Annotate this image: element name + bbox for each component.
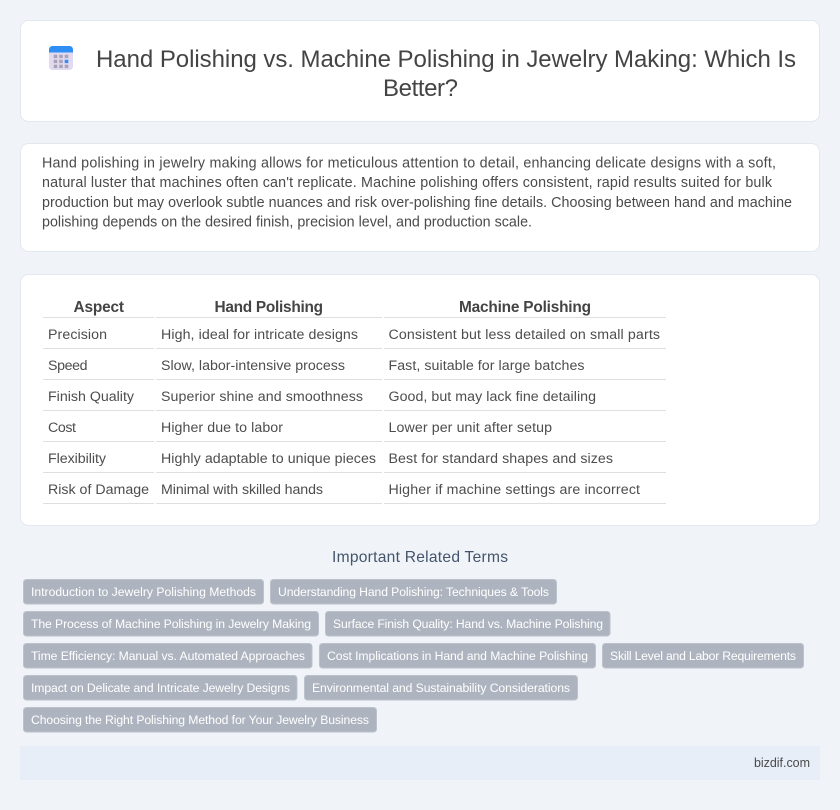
row: risk of damage: Minimal with skilled hands bbox=[161, 482, 323, 498]
tag: Introduction to Jewelry Polishing Methods bbox=[31, 585, 256, 599]
tag: Cost Implications in Hand and Machine Polishing bbox=[327, 649, 588, 663]
tag: The Process of Machine Polishing in Jewelry Making bbox=[31, 617, 311, 631]
row: finish quality: Superior shine and smoothness bbox=[161, 389, 363, 405]
heading: important related terms: Important Related Terms bbox=[332, 549, 508, 566]
row: finish quality: Finish Quality bbox=[48, 389, 135, 405]
tag: Choosing the Right Polishing Method for Your Jewelry Business bbox=[31, 713, 369, 727]
row: cost: Lower per unit after setup bbox=[388, 420, 552, 436]
row: finish quality bbox=[48, 389, 596, 405]
panel: comparison table bbox=[20, 274, 820, 526]
tag bbox=[320, 644, 596, 668]
row: cost bbox=[48, 420, 552, 436]
row: speed bbox=[48, 358, 584, 374]
row: risk of damage: Higher if machine settings are incorrect bbox=[388, 482, 640, 498]
tag: Surface Finish Quality: Hand vs. Machine Polishing bbox=[333, 617, 603, 631]
row: cost: Cost bbox=[48, 420, 76, 436]
row: finish quality: Good, but may lack fine detailing bbox=[388, 389, 596, 405]
text block: introduction paragraph: Hand polishing in jewelry making allows for meticulous attention to detail, enhancing delicate designs with a soft, bbox=[42, 156, 776, 172]
tag bbox=[326, 612, 610, 636]
title: Hand Polishing vs. Machine Polishing in Jewelry Making: Which Is bbox=[96, 46, 796, 73]
tag: Impact on Delicate and Intricate Jewelry Designs bbox=[31, 681, 290, 695]
tag bbox=[24, 644, 312, 668]
title: Better? bbox=[383, 75, 458, 102]
table grid bbox=[43, 318, 666, 504]
row: precision bbox=[48, 327, 660, 343]
row: flexibility: Highly adaptable to unique pieces bbox=[161, 451, 376, 467]
icon: calendar bbox=[49, 46, 73, 70]
row: precision: High, ideal for intricate designs bbox=[161, 327, 358, 343]
tag: Understanding Hand Polishing: Techniques & Tools bbox=[278, 585, 549, 599]
row: flexibility: Best for standard shapes and sizes bbox=[388, 451, 613, 467]
tag bbox=[24, 676, 297, 700]
tag bbox=[270, 580, 556, 604]
footer source text: bizdif.com bbox=[754, 756, 810, 770]
tag bbox=[24, 708, 376, 732]
tag bbox=[304, 676, 578, 700]
tag: Skill Level and Labor Requirements bbox=[610, 649, 796, 663]
row: risk of damage: Risk of Damage bbox=[48, 482, 149, 498]
row: precision: Precision bbox=[48, 327, 107, 343]
row: risk of damage bbox=[48, 482, 640, 498]
panel: introduction bbox=[20, 144, 820, 252]
tags: related terms bbox=[24, 580, 804, 732]
text block: introduction paragraph: production but may overlook subtle nuances and risk over-polishing fine details. Choosing between hand and machine bbox=[42, 195, 792, 211]
footer bbox=[20, 746, 820, 780]
row: speed: Fast, suitable for large batches bbox=[388, 358, 584, 374]
text block: introduction paragraph bbox=[42, 156, 792, 230]
row: flexibility bbox=[48, 451, 613, 467]
text block: introduction paragraph: natural luster that machines often can't replicate. Machine polishing offers consistent, rapid results suited for bulk bbox=[42, 175, 773, 191]
row: cost: Higher due to labor bbox=[161, 420, 283, 436]
row: speed: Speed bbox=[48, 358, 88, 374]
row: speed: Slow, labor-intensive process bbox=[161, 358, 345, 374]
row: precision: Consistent but less detailed on small parts bbox=[388, 327, 660, 343]
panel: header bbox=[20, 20, 820, 122]
tag: Environmental and Sustainability Considerations bbox=[312, 681, 570, 695]
table header: Aspect bbox=[74, 299, 124, 316]
table header bbox=[74, 299, 591, 316]
row: flexibility: Flexibility bbox=[48, 451, 107, 467]
tag bbox=[24, 580, 264, 604]
tag bbox=[24, 612, 318, 636]
tag: Time Efficiency: Manual vs. Automated Approaches bbox=[31, 649, 305, 663]
tag bbox=[602, 644, 804, 668]
table header: Machine Polishing bbox=[459, 299, 591, 316]
table header: Hand Polishing bbox=[214, 299, 323, 316]
text block: introduction paragraph: polishing depends on the desired finish, precision level, and production scale. bbox=[42, 214, 532, 230]
